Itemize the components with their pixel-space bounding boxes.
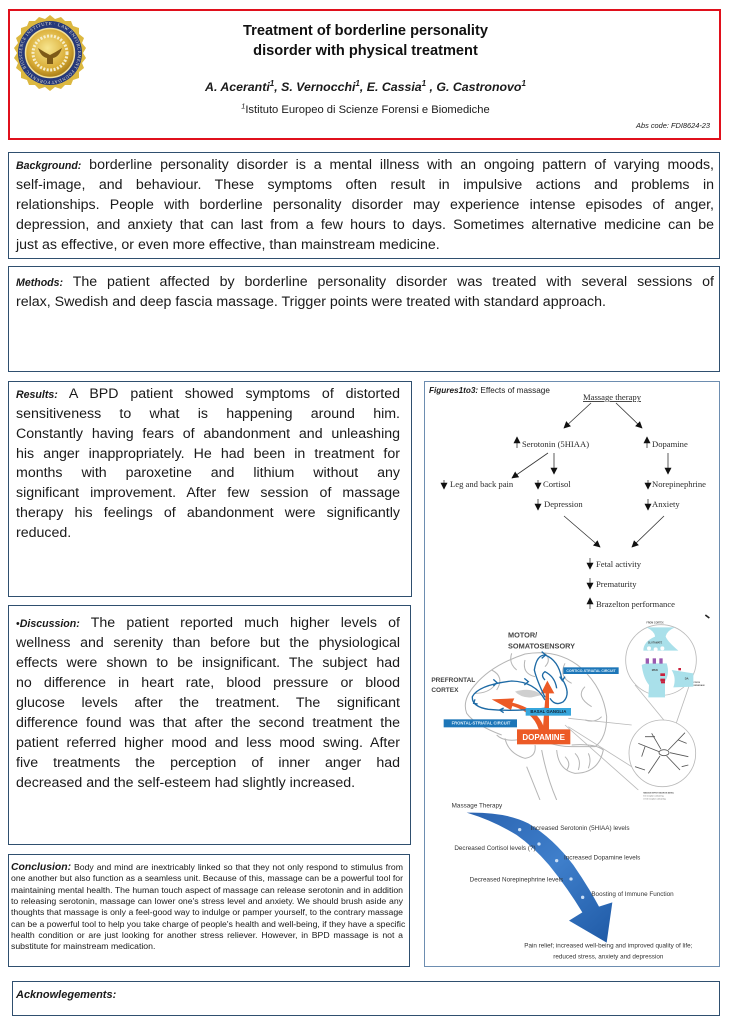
- results text: [16, 386, 400, 541]
- results text: significant improvement. After few session of massage: [16, 485, 400, 501]
- blue circuit loops: [472, 655, 567, 710]
- discussion text: patient referred higher mood and less mood swing. After: [16, 735, 400, 751]
- conclusion text: one another but also function as a seamless unit. Because of this, massage can be a powerful tool for: [11, 873, 403, 883]
- panel: results: [8, 381, 412, 597]
- abstract code: Abs code: FDI8624-23: [636, 121, 710, 130]
- discussion text: decreased and the self-esteem had slightly increased.: [16, 775, 355, 791]
- title: disorder with physical treatment: [253, 43, 478, 59]
- label: prefrontal cortex: CORTEX: [431, 687, 459, 694]
- panel: figures: [424, 381, 720, 967]
- brain outline: [465, 653, 607, 800]
- label: cortico-striatal circuit: CORTICO-STRIATAL CIRCUIT: [566, 669, 616, 673]
- chart: brain dopamine circuits: [431, 614, 710, 800]
- label: basal ganglia: [526, 708, 571, 716]
- panel: conclusion: [8, 854, 410, 967]
- label: motor somatosensory: SOMATOSENSORY: [508, 642, 575, 651]
- label: cortico-striatal circuit: [563, 667, 619, 674]
- neuron caption: [643, 793, 674, 800]
- synapse circle: [626, 625, 696, 697]
- conclusion text: can be a powerful tool to help you take charge of people's health and well-being, if they have a specific: [11, 918, 405, 928]
- results text: sensitiveness to what is happening around him.: [16, 406, 400, 422]
- arrow labels: Boosting of Immune Function: [591, 891, 674, 898]
- label: from cortex: FROM CORTEX: [646, 623, 664, 625]
- panel: acknowledgements: [12, 981, 720, 1016]
- methods text: [16, 274, 714, 310]
- conclusion text: Conclusion: Body and mind are inextricably linked so that they not only respond to stimulus from: [11, 862, 403, 873]
- synapse circle: GLUTAMATE: [648, 641, 663, 644]
- arrow labels: Decreased Cortisol levels (?): [454, 845, 536, 852]
- conclusion text: substitute for mainstream medication.: [11, 941, 155, 951]
- conclusion text: [11, 862, 406, 951]
- chart: massage therapy flow diagram: Norepinephrine: [652, 479, 706, 489]
- label: dopamine: DOPAMINE: [522, 733, 566, 742]
- title: [243, 23, 488, 59]
- background text: self-image, and behaviour. These symptoms often result in impulsive actions and problems in: [16, 177, 714, 193]
- results text: Constantly having fears of abandonment and unleashing: [16, 426, 400, 442]
- panel: discussion: [8, 605, 411, 845]
- label: prefrontal cortex: PREFRONTAL: [431, 677, 475, 684]
- acknowledgements heading: Acknowlegements:: [16, 989, 116, 1001]
- results text: Results: A BPD patient showed symptoms of distorted: [16, 386, 400, 402]
- arrow labels: Increased Dopamine levels: [564, 855, 640, 862]
- label: dopamine: [517, 729, 570, 744]
- chart: massage therapy flow diagram: Cortisol: [543, 479, 571, 489]
- conclusion text: health condition or are just looking for another stress reliever. However, in BPD massage is not a: [11, 930, 403, 940]
- arrow labels: Massage Therapy: [452, 802, 503, 809]
- label: frontal-striatal circuit: FRONTAL-STRIATAL CIRCUIT: [452, 721, 511, 726]
- results text: reduced.: [16, 525, 71, 541]
- results text: months with paroxetine and lithium without any: [16, 465, 400, 481]
- header panel: [8, 9, 721, 140]
- label: prefrontal cortex: [431, 677, 475, 694]
- panel: background: [8, 152, 720, 259]
- conclusion text: maintaining mental health. The human touch aspect of massage can release serotonin and in addition: [11, 885, 403, 895]
- conclusion text: thoughts that massage is only a feel-good way to indulge or pamper yourself, to the contrary massage: [11, 907, 403, 917]
- title: Treatment of borderline personality: [243, 23, 488, 39]
- affiliation: 1Istituto Europeo di Scienze Forensi e Biomediche: [241, 101, 490, 116]
- label: from midbrain: MIDBRAIN: [694, 684, 705, 687]
- results text: his anger inappropriately. He had been in treatment for: [16, 446, 400, 462]
- chart: massage therapy flow diagram: Depression: [544, 499, 583, 509]
- label: motor somatosensory: [508, 630, 575, 651]
- neuron circle: [629, 720, 696, 787]
- background text: [16, 157, 714, 253]
- chart: massage therapy flow diagram: Prematurity: [596, 579, 637, 589]
- neuron caption: D1 receptor containing: [643, 795, 663, 798]
- conclusion text: to releasing serotonin, massage can lower one's stress level and anxiety. We should brush aside any: [11, 896, 403, 906]
- arrow labels: reduced stress, anxiety and depression: [553, 953, 664, 960]
- chart: massage therapy flow diagram: [440, 392, 706, 609]
- arrow: [467, 813, 612, 943]
- discussion text: [16, 615, 400, 791]
- chart: massage therapy flow diagram: Leg and back pain: [450, 479, 514, 489]
- synapse circle: DA: [685, 676, 689, 680]
- background text: depression, and anxiety that can last from a few hours to days. Sometimes alternative medicine can be: [16, 217, 714, 233]
- synapse circle: MSN: [652, 668, 658, 672]
- connector lines: [565, 678, 692, 790]
- arrow labels: Increased Serotonin (5HIAA) levels: [531, 825, 630, 832]
- chart: massage therapy flow diagram: Fetal activity: [596, 559, 642, 569]
- chart: massage therapy flow diagram: Dopamine: [652, 439, 688, 449]
- label: basal ganglia: BASAL GANGLIA: [530, 709, 567, 714]
- discussion text: effects were shown to be insignificant. The subject had: [16, 655, 400, 671]
- label: motor somatosensory: MOTOR/: [508, 630, 537, 639]
- discussion text: •Discussion: The patient reported much higher levels of: [16, 615, 400, 631]
- chart: massage therapy flow diagram: Brazelton performance: [596, 599, 675, 609]
- chart: massage therapy flow diagram: Massage therapy: [583, 392, 642, 402]
- discussion text: difference found was that after the second treatment the: [16, 715, 400, 731]
- results text: therapy his feelings of abandonment were significantly: [16, 505, 400, 521]
- background text: just as effective, or even more effective, than mainstream medicine.: [16, 237, 440, 253]
- neuron caption: MEDIUM SPINY NEURON (MSN): [643, 793, 674, 795]
- orange dopamine arrows: [492, 681, 554, 735]
- figures caption: Figures1to3: Effects of massage: [429, 386, 550, 395]
- arrow labels: [452, 802, 693, 960]
- discussion text: no difference in heart rate, blood pressure or blood: [16, 675, 400, 691]
- label: from midbrain: FROM: [694, 682, 700, 684]
- methods text: relax, Swedish and deep fascia massage. Trigger points were treated with standard approach.: [16, 294, 606, 310]
- discussion text: five treatments the perception of inner anger had: [16, 755, 400, 771]
- panel: methods: [8, 266, 720, 372]
- arrow labels: Pain relief; increased well-being and improved quality of life;: [524, 943, 693, 950]
- discussion text: glucose levels after the treatment. The significant: [16, 695, 400, 711]
- methods text: Methods: The patient affected by borderline personality disorder was treated with several sessions of: [16, 274, 714, 290]
- background text: relationships. People with borderline personality disorder may experience intense episodes of anger,: [16, 197, 714, 213]
- icon: small mark: [705, 615, 709, 618]
- chart: massage therapy flow diagram: Serotonin (5HIAA): [522, 439, 589, 449]
- discussion text: wellness and serenity than before but the physiological: [16, 635, 400, 651]
- label: frontal-striatal circuit: [444, 719, 517, 727]
- chart: curved arrow of massage effects: [452, 802, 693, 960]
- authors: A. Aceranti1, S. Vernocchi1, E. Cassia1 , G. Castronovo1: [205, 79, 526, 94]
- chart: massage therapy flow diagram: Anxiety: [652, 499, 680, 509]
- background text: Background: borderline personality disorder is a mental illness with an ongoing pattern of varying moods,: [16, 157, 714, 173]
- arrow labels: Decreased Norepinephrine levels: [470, 876, 563, 883]
